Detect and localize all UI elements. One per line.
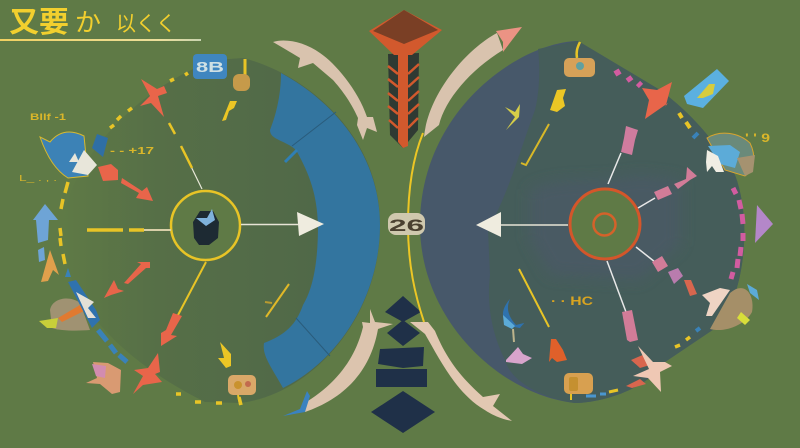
blue triangle marker	[65, 268, 71, 277]
panel: right semicircle	[420, 41, 773, 403]
title	[0, 7, 201, 41]
icon: yellow mark top	[222, 101, 237, 121]
icon: tan blob with carrot	[39, 280, 100, 331]
center label	[388, 213, 425, 235]
spoke: lower with arrow	[161, 262, 206, 346]
arrow: yellow curve	[408, 133, 424, 322]
icon: light blue tile	[684, 69, 729, 108]
coral arrows lower	[104, 262, 150, 298]
left blue band	[264, 73, 380, 388]
icon: dome with figure	[706, 133, 755, 176]
center label: 26	[389, 216, 424, 235]
blue dash	[693, 133, 698, 138]
icon: tan blob with figure	[702, 284, 759, 330]
coral star top	[140, 79, 167, 117]
pink dashes right	[731, 188, 743, 279]
icon: blue cube: 8B	[196, 59, 224, 76]
center ring	[570, 189, 640, 259]
title: 又要	[9, 7, 69, 39]
coral star upper right	[642, 82, 672, 119]
icon: yellow mark	[550, 89, 566, 112]
ring inner	[594, 214, 616, 236]
spoke: upper	[169, 123, 202, 189]
center left arrow	[476, 212, 568, 237]
center tower top	[369, 10, 442, 148]
icon: orange badge top	[564, 42, 595, 77]
yellow marks top right: ' ' 9	[745, 131, 770, 145]
tower stripes	[388, 64, 419, 128]
yellow-blue dashes	[679, 113, 690, 128]
title: 以くく	[116, 13, 176, 36]
arrow: curved bottom-right	[410, 322, 512, 421]
small yellow labels: Bllf -1	[30, 112, 66, 122]
blue dash lower	[696, 328, 700, 331]
center right arrow	[241, 212, 324, 236]
small yellow labels	[19, 112, 155, 183]
pink dots upper	[616, 70, 641, 86]
label lower: · · HC	[551, 294, 593, 308]
spoke lower right pink	[636, 247, 697, 296]
left dark disc	[62, 58, 380, 403]
icon: pink arrow	[506, 347, 532, 364]
yellow line lower	[519, 269, 549, 327]
yellow line upper	[521, 124, 549, 165]
tower roof shade	[373, 10, 438, 44]
spoke: left dashes	[87, 228, 144, 232]
dashed perimeter yellow	[60, 73, 188, 264]
title rule	[0, 39, 201, 41]
icon: yellow check	[505, 104, 520, 130]
tower roof	[369, 10, 442, 55]
tower body	[388, 53, 419, 148]
band seams	[292, 112, 336, 356]
arrow: curved bottom-left	[283, 309, 393, 416]
coral star bottom	[133, 353, 162, 394]
icon: tan badge	[233, 59, 250, 91]
spoke upper right pink	[638, 167, 697, 208]
arrow: curved top-right	[424, 27, 522, 137]
icon: orange blob	[549, 339, 567, 362]
icon: purple arrow	[755, 205, 773, 243]
slate patch	[530, 175, 680, 280]
icon: orange badge bottom	[564, 373, 618, 400]
small yellow labels: L_ . , .	[19, 174, 57, 183]
center circle	[171, 191, 240, 260]
blue band tick	[285, 150, 297, 162]
title: か	[75, 9, 101, 37]
spoke: left line	[144, 229, 171, 231]
arrow: curved top-left	[273, 40, 377, 140]
center icon	[193, 211, 219, 245]
icon: pink blob	[86, 362, 121, 394]
right inner dark region	[488, 41, 744, 403]
icon: blue gem with figure	[40, 132, 108, 178]
icon: yellow mark bottom	[218, 342, 231, 368]
tower column	[398, 50, 408, 148]
dashed perimeter blue	[98, 330, 127, 362]
small yellow labels: - - +17	[110, 146, 155, 157]
icon: peach star	[626, 346, 672, 392]
icon: blue swoosh	[503, 299, 524, 342]
dashed perimeter yellow lower	[176, 394, 241, 405]
center stack bottom	[371, 296, 435, 433]
yellow line lower	[265, 284, 289, 317]
panel: left semicircle	[19, 54, 380, 405]
icon: blue cube	[193, 54, 227, 79]
icon: blue up arrow	[33, 204, 59, 282]
spoke upper pink	[608, 126, 638, 184]
right slate disc	[420, 41, 744, 403]
icon: tan badge bottom	[228, 375, 256, 405]
coral arrows upper	[98, 164, 153, 201]
yellow dashes lower	[675, 337, 690, 347]
spoke lower pink	[607, 261, 638, 342]
